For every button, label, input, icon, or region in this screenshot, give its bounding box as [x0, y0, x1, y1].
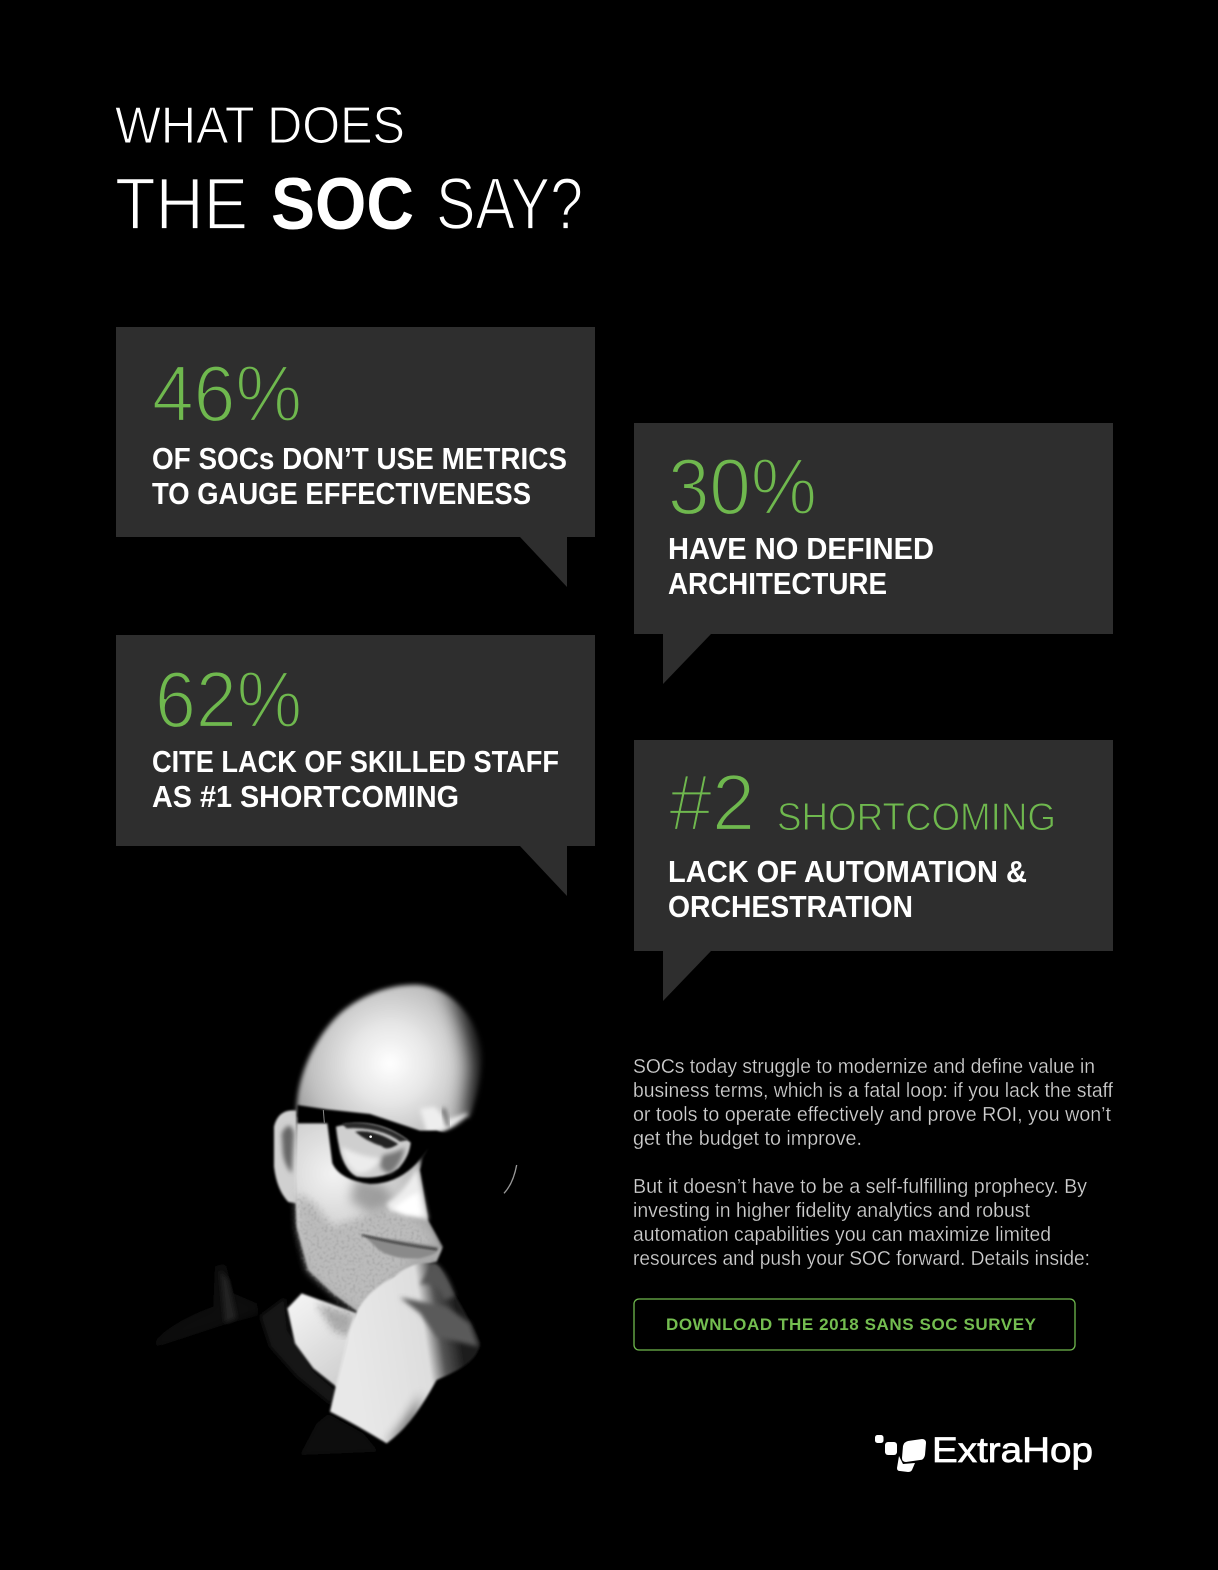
portrait of thinking man with glasses: [120, 977, 523, 1455]
body text: But it doesn’t have to be a self-fulfilling prophecy. By: [633, 1176, 1087, 1198]
logo: ExtraHop: [875, 1431, 1093, 1472]
icon: ExtraHop mark: [875, 1435, 926, 1472]
title: SOC: [271, 164, 414, 245]
panel: 46% callout: 46%: [152, 349, 302, 438]
panel: 62% callout: AS #1 SHORTCOMING: [152, 779, 459, 814]
panel: 30% callout: ARCHITECTURE: [668, 566, 887, 601]
glasses: [297, 1105, 517, 1193]
title: WHAT DOES: [115, 97, 405, 155]
logo: ExtraHop: ExtraHop: [932, 1431, 1093, 1470]
body text: [633, 1056, 1113, 1270]
panel: 62% callout: 62%: [155, 655, 302, 744]
panel: 62% callout: CITE LACK OF SKILLED STAFF: [152, 744, 559, 779]
panel: 46% callout: OF SOCs DON’T USE METRICS: [152, 441, 567, 476]
panel: #2 shortcoming callout: #2: [669, 758, 755, 847]
panel: 62% callout: [116, 635, 595, 896]
body text: investing in higher fidelity analytics and robust: [633, 1200, 1030, 1222]
panel: 46% callout: TO GAUGE EFFECTIVENESS: [152, 476, 531, 511]
body text: business terms, which is a fatal loop: if you lack the staff: [633, 1080, 1113, 1102]
panel: #2 shortcoming callout: LACK OF AUTOMATION &: [668, 854, 1027, 889]
download button: DOWNLOAD THE 2018 SANS SOC SURVEY: [666, 1315, 1037, 1334]
body text: automation capabilities you can maximize limited: [633, 1224, 1051, 1246]
body text: SOCs today struggle to modernize and define value in: [633, 1056, 1095, 1078]
panel: 30% callout: 30%: [668, 442, 817, 531]
panel: #2 shortcoming callout: [634, 740, 1113, 1001]
panel: #2 shortcoming callout: ORCHESTRATION: [668, 889, 913, 924]
title: THE: [115, 164, 248, 245]
download button: [634, 1299, 1075, 1350]
title: SAY?: [436, 164, 583, 245]
body text: resources and push your SOC forward. Details inside:: [633, 1248, 1090, 1270]
panel: #2 shortcoming callout: SHORTCOMING: [777, 796, 1056, 839]
body text: or tools to operate effectively and prove ROI, you won’t: [633, 1104, 1111, 1126]
panel: 30% callout: HAVE NO DEFINED: [668, 531, 934, 566]
panel: 30% callout: [634, 423, 1113, 684]
body text: get the budget to improve.: [633, 1128, 862, 1150]
panel: 46% callout: [116, 327, 595, 587]
title: [115, 97, 583, 245]
